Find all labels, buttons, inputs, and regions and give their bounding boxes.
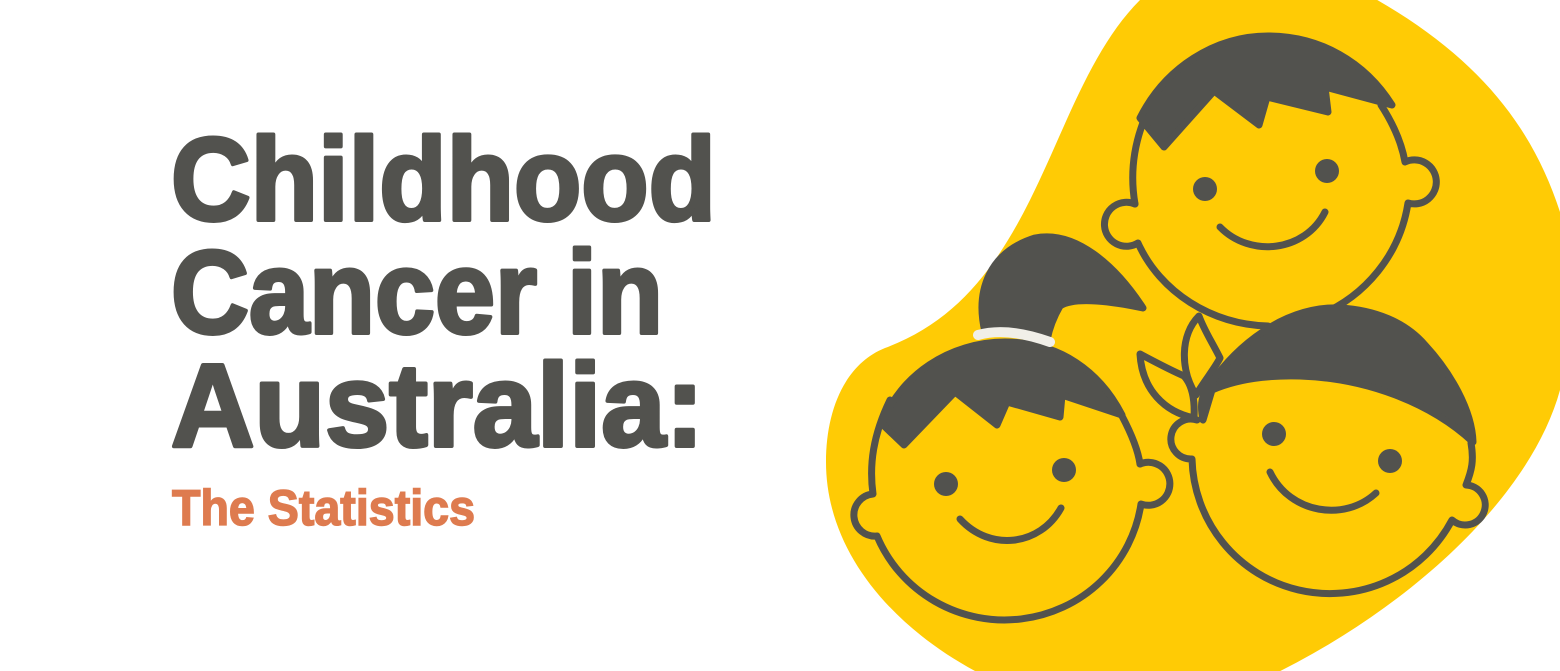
- yellow background blob: [826, 0, 1560, 671]
- eyes: [1193, 159, 1339, 201]
- smile: [960, 508, 1061, 541]
- hair band: [978, 332, 1050, 342]
- title: Cancer in: [171, 227, 663, 359]
- title: [171, 114, 716, 472]
- smile: [1220, 212, 1325, 247]
- icon: left child with ponytail: [854, 237, 1170, 620]
- title: Australia:: [171, 340, 704, 472]
- icon: right child face: [1171, 308, 1485, 594]
- hair: [1202, 308, 1473, 442]
- hair: [882, 342, 1122, 445]
- icon: leaves between the children: [1140, 316, 1220, 418]
- eyes: [1262, 422, 1402, 473]
- hair: [1140, 36, 1392, 147]
- title: Childhood: [171, 114, 716, 246]
- eyes: [934, 458, 1076, 496]
- subtitle: The Statistics: [172, 480, 475, 536]
- smile: [1270, 472, 1376, 510]
- icon: top child face: [1104, 36, 1436, 326]
- ponytail: [982, 237, 1143, 340]
